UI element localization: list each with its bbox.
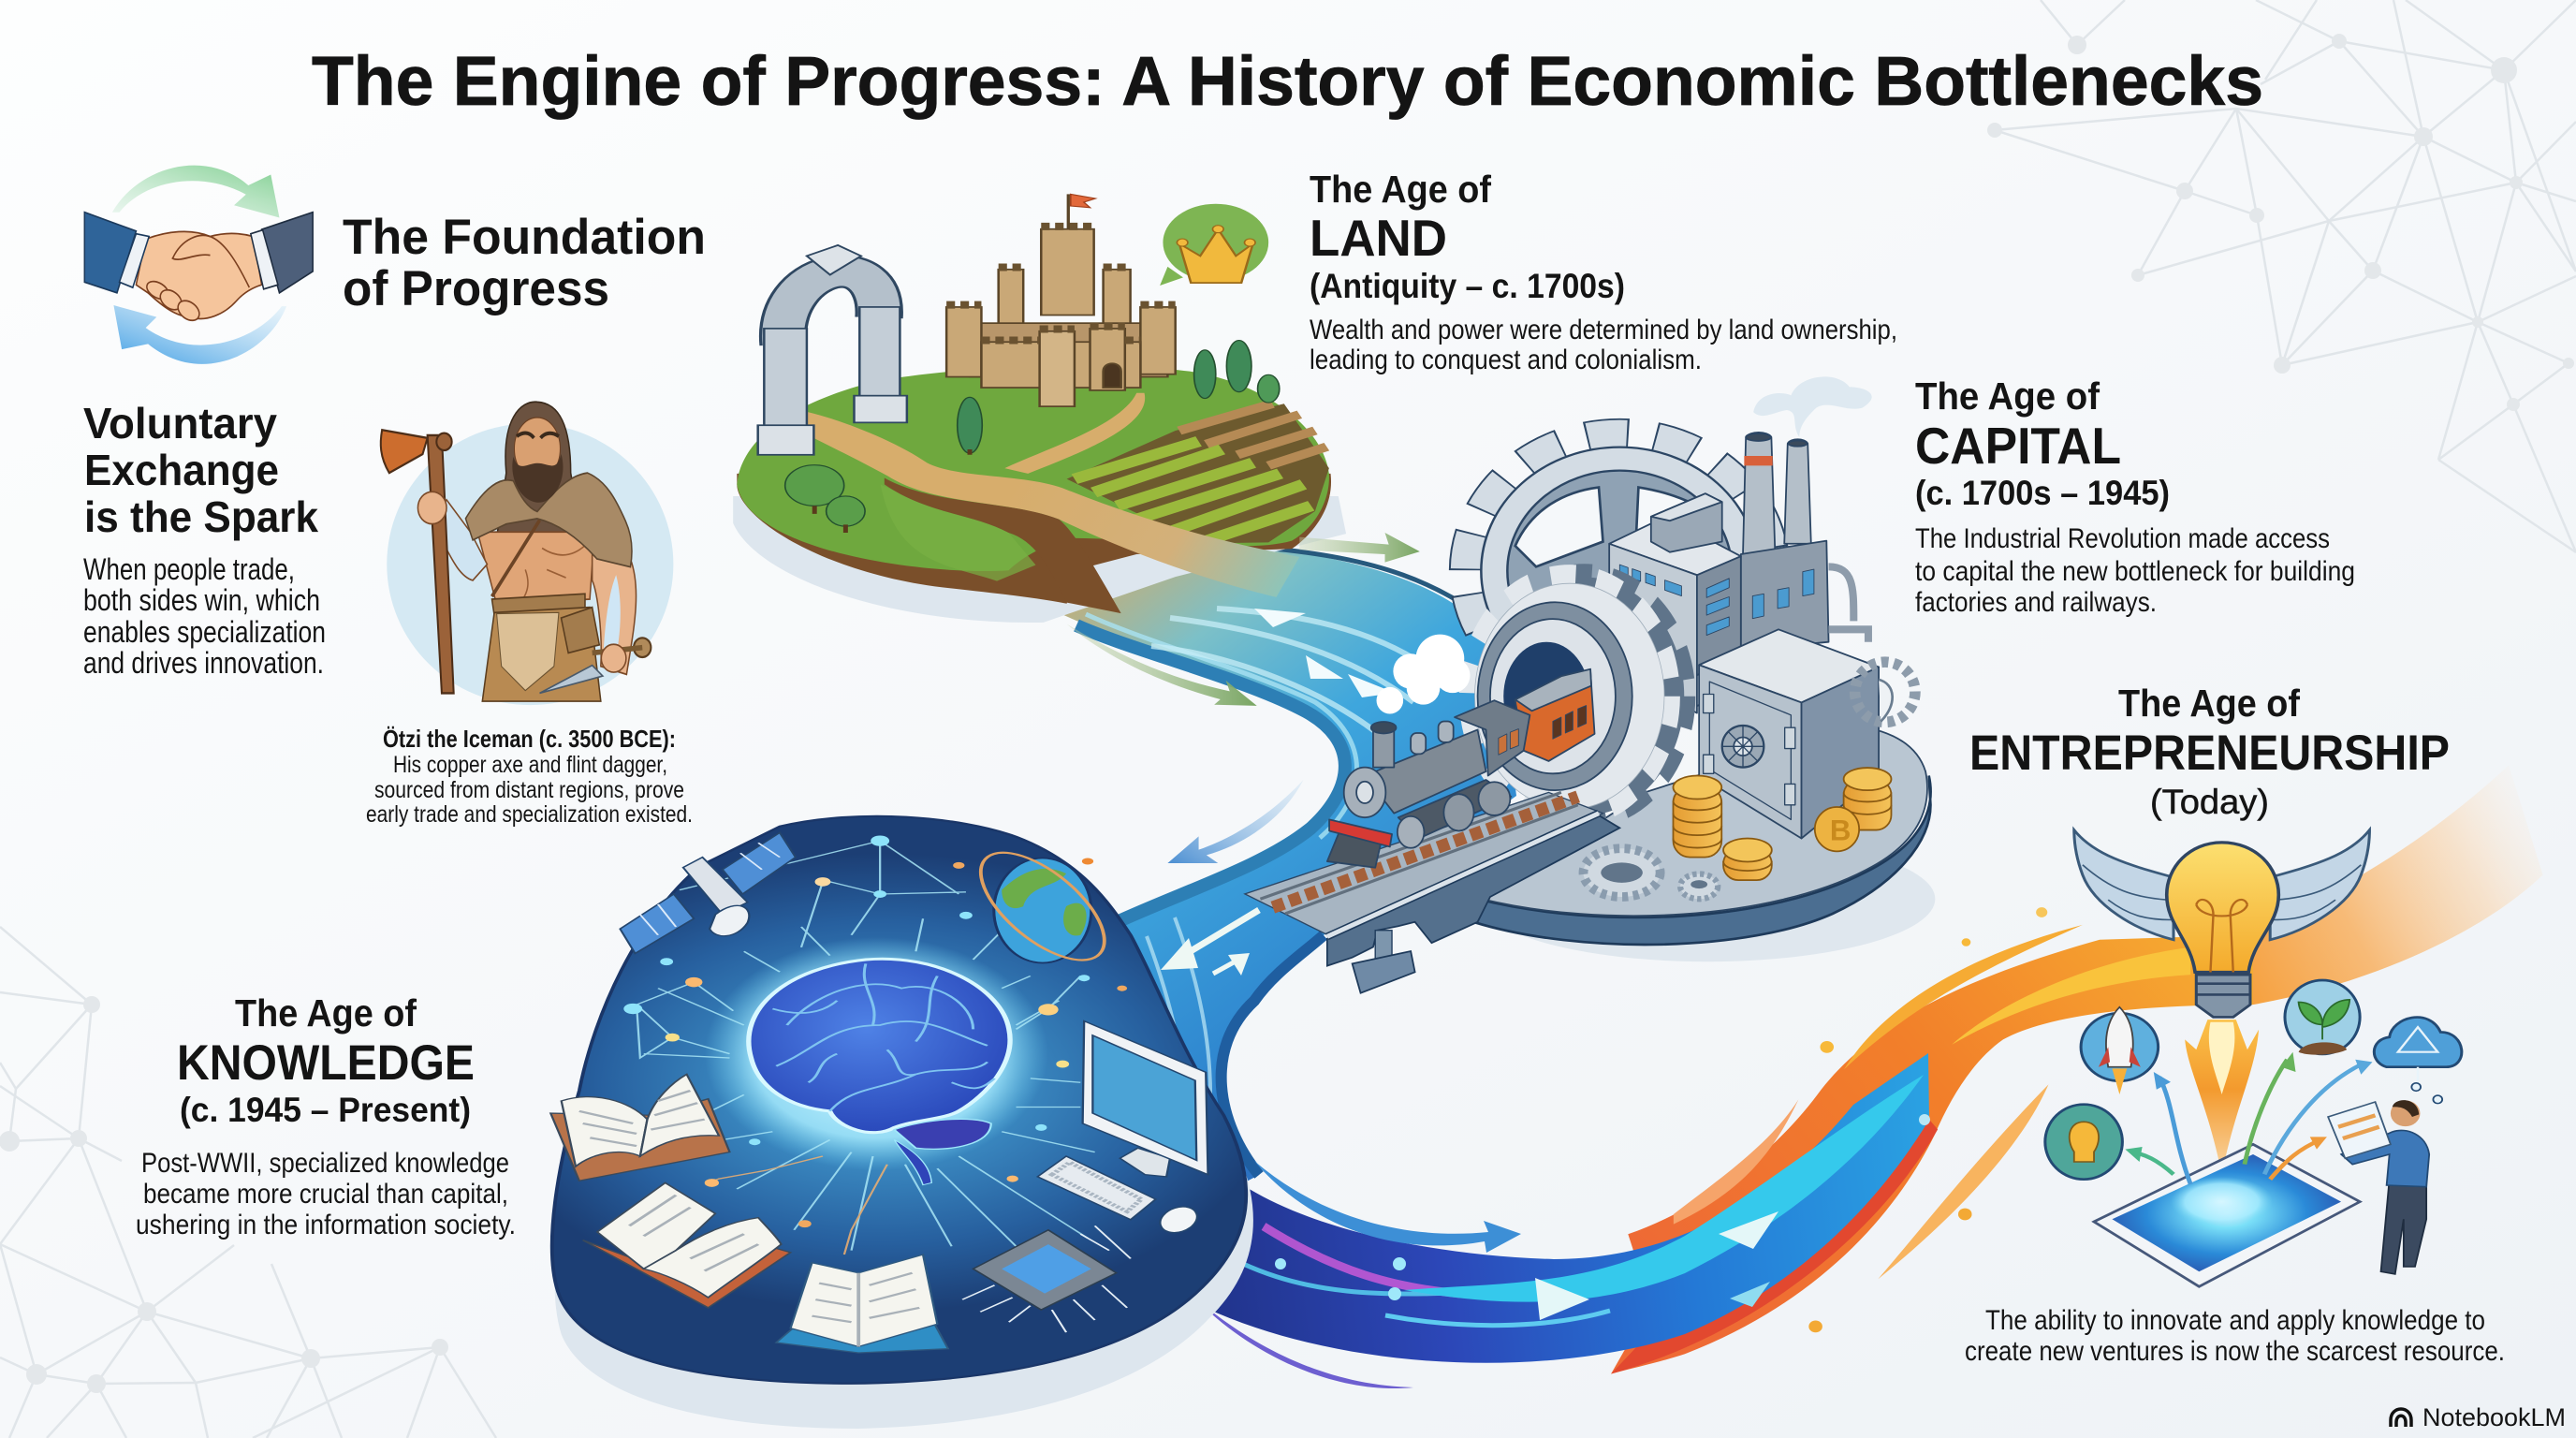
factory smoke [1753, 376, 1872, 437]
figure: person with document [2328, 1100, 2429, 1274]
heading: age of capital: (c. 1700s – 1945) [1915, 474, 2170, 512]
front gear and tunnel [1470, 578, 1684, 815]
icon: tablet glow [2171, 1177, 2273, 1226]
flow: orange energy ribbon into entrepreneurship [1611, 765, 2543, 1374]
icon: open book 3 [776, 1255, 948, 1353]
heading: voluntary exchange: is the Spark [84, 492, 318, 541]
pipes [1829, 566, 1868, 642]
icon: computer [1037, 1021, 1208, 1236]
brain glow [705, 937, 1048, 1170]
text: age of knowledge body: ushering in the information society. [136, 1210, 516, 1240]
heading: age of knowledge: The Age of [235, 991, 417, 1034]
flow: river from land through capital to knowledge [1030, 548, 1516, 1226]
icon: trees [785, 341, 1280, 533]
icon: stone arch [758, 245, 907, 455]
illustration: otzi the iceman [381, 402, 673, 705]
text: voluntary exchange body: both sides win, which [83, 583, 320, 617]
icon: open book 1 [550, 1075, 730, 1181]
text: voluntary exchange body [83, 552, 326, 680]
text: otzi caption: Ötzi the Iceman (c. 3500 BCE): [383, 725, 676, 753]
illustration: entrepreneurship [2045, 830, 2462, 1286]
heading: the foundation of progress: of Progress [343, 261, 609, 316]
flame [2185, 1020, 2259, 1174]
arrowheads [2125, 1052, 2372, 1162]
heading: age of land: The Age of [1310, 168, 1491, 211]
heading: age of capital [1915, 374, 2170, 512]
text: entrepreneurship body [1965, 1305, 2505, 1367]
icon: winged lightbulb [2074, 830, 2369, 1017]
illustration: capital platform with factory and train [1245, 376, 1935, 993]
text: age of knowledge body [136, 1148, 516, 1240]
train [1327, 669, 1595, 868]
text: otzi caption: sourced from distant regions, prove [374, 777, 684, 803]
text: age of capital body: The Industrial Revolution made access [1915, 523, 2330, 554]
icon: sprout badge [2285, 980, 2360, 1055]
heading: age of capital: CAPITAL [1915, 417, 2121, 475]
text: voluntary exchange body: When people trade, [83, 552, 295, 586]
text: voluntary exchange body: and drives innovation. [83, 646, 324, 680]
heading: voluntary exchange: Exchange [84, 446, 279, 494]
title: The Engine of Progress: A History of Economic Bottlenecks [312, 42, 2263, 120]
flow: knowledge to entrepreneurship blue ribbon [1188, 1053, 1930, 1388]
text: otzi caption: His copper axe and flint dagger, [393, 752, 667, 778]
icon: tablet [2094, 1144, 2360, 1286]
text: age of knowledge body: became more crucial than capital, [143, 1179, 508, 1210]
icon: microchip [962, 1225, 1131, 1332]
icon: castle [946, 194, 1176, 406]
coin symbol: B [1830, 814, 1851, 847]
glowing nodes [623, 835, 1127, 1227]
platform top [1482, 726, 1927, 916]
heading: the foundation of progress [343, 210, 706, 316]
heading: age of entrepreneurship [1969, 682, 2450, 821]
icon: cloud network [2374, 1018, 2462, 1104]
small gears on platform [1583, 848, 1718, 899]
arrows: green from land [1067, 533, 1420, 863]
icon: satellite [620, 832, 796, 953]
blob base [552, 816, 1246, 1384]
icon: small bulb badge [2045, 1105, 2122, 1180]
text: voluntary exchange body: enables specialization [83, 615, 326, 649]
illustration: land island with castle [733, 194, 1346, 623]
text: age of land body: Wealth and power were determined by land ownership, [1310, 315, 1897, 345]
network pattern: top right [1987, 0, 2576, 552]
text: otzi caption: early trade and specialization existed. [366, 801, 693, 828]
text: entrepreneurship body: The ability to innovate and apply knowledge to [1985, 1305, 2485, 1336]
text: otzi caption [366, 725, 693, 828]
platform base [1473, 776, 1931, 945]
illustration: knowledge hub [550, 816, 1253, 1429]
text: age of capital body: to capital the new bottleneck for building [1915, 556, 2355, 587]
icon: open book 2 [583, 1182, 791, 1308]
heading: age of capital: The Age of [1915, 374, 2100, 418]
heading: age of land: (Antiquity – c. 1700s) [1310, 267, 1625, 305]
text: age of land body: leading to conquest and colonialism. [1310, 345, 1702, 375]
arrows from tablet [2130, 1060, 2361, 1184]
icon: brain [749, 959, 1010, 1185]
icon: globe with orbit [956, 843, 1129, 970]
text: age of knowledge body: Post-WWII, specialized knowledge [141, 1148, 509, 1179]
steam clouds [1377, 635, 1471, 713]
heading: age of knowledge: (c. 1945 – Present) [180, 1091, 471, 1129]
heading: voluntary exchange [83, 399, 318, 541]
text: age of capital body [1915, 523, 2355, 618]
factory [1609, 433, 1829, 713]
small gear behind safe [1855, 662, 1915, 722]
heading: voluntary exchange: Voluntary [83, 399, 277, 448]
heading: age of land [1310, 168, 1625, 305]
big gear [1468, 435, 1772, 707]
heading: age of knowledge [177, 991, 475, 1129]
icon: handshake with exchange arrows [84, 166, 313, 364]
heading: the foundation of progress: The Foundation [343, 210, 706, 265]
network pattern: bottom left [0, 927, 496, 1438]
heading: age of entrepreneurship: (Today) [2150, 783, 2269, 821]
icon: notebooklm logo [2391, 1409, 2411, 1427]
text: notebooklm brand: NotebookLM [2422, 1403, 2566, 1431]
text: age of land body [1310, 315, 1897, 375]
text: age of capital body: factories and railways. [1915, 587, 2157, 618]
bridge and track [1245, 792, 1619, 993]
text: entrepreneurship body: create new ventures is now the scarcest resource. [1965, 1336, 2505, 1367]
icon: rocket badge [2081, 1007, 2159, 1094]
safe [1699, 629, 1879, 839]
heading: age of entrepreneurship: ENTREPRENEURSHIP [1969, 726, 2450, 781]
heading: age of knowledge: KNOWLEDGE [177, 1035, 475, 1091]
circuit rays [637, 841, 1095, 1255]
icon: crown badge [1160, 204, 1268, 286]
heading: age of entrepreneurship: The Age of [2118, 682, 2300, 725]
coins [1673, 768, 1891, 880]
heading: age of land: LAND [1310, 209, 1447, 267]
